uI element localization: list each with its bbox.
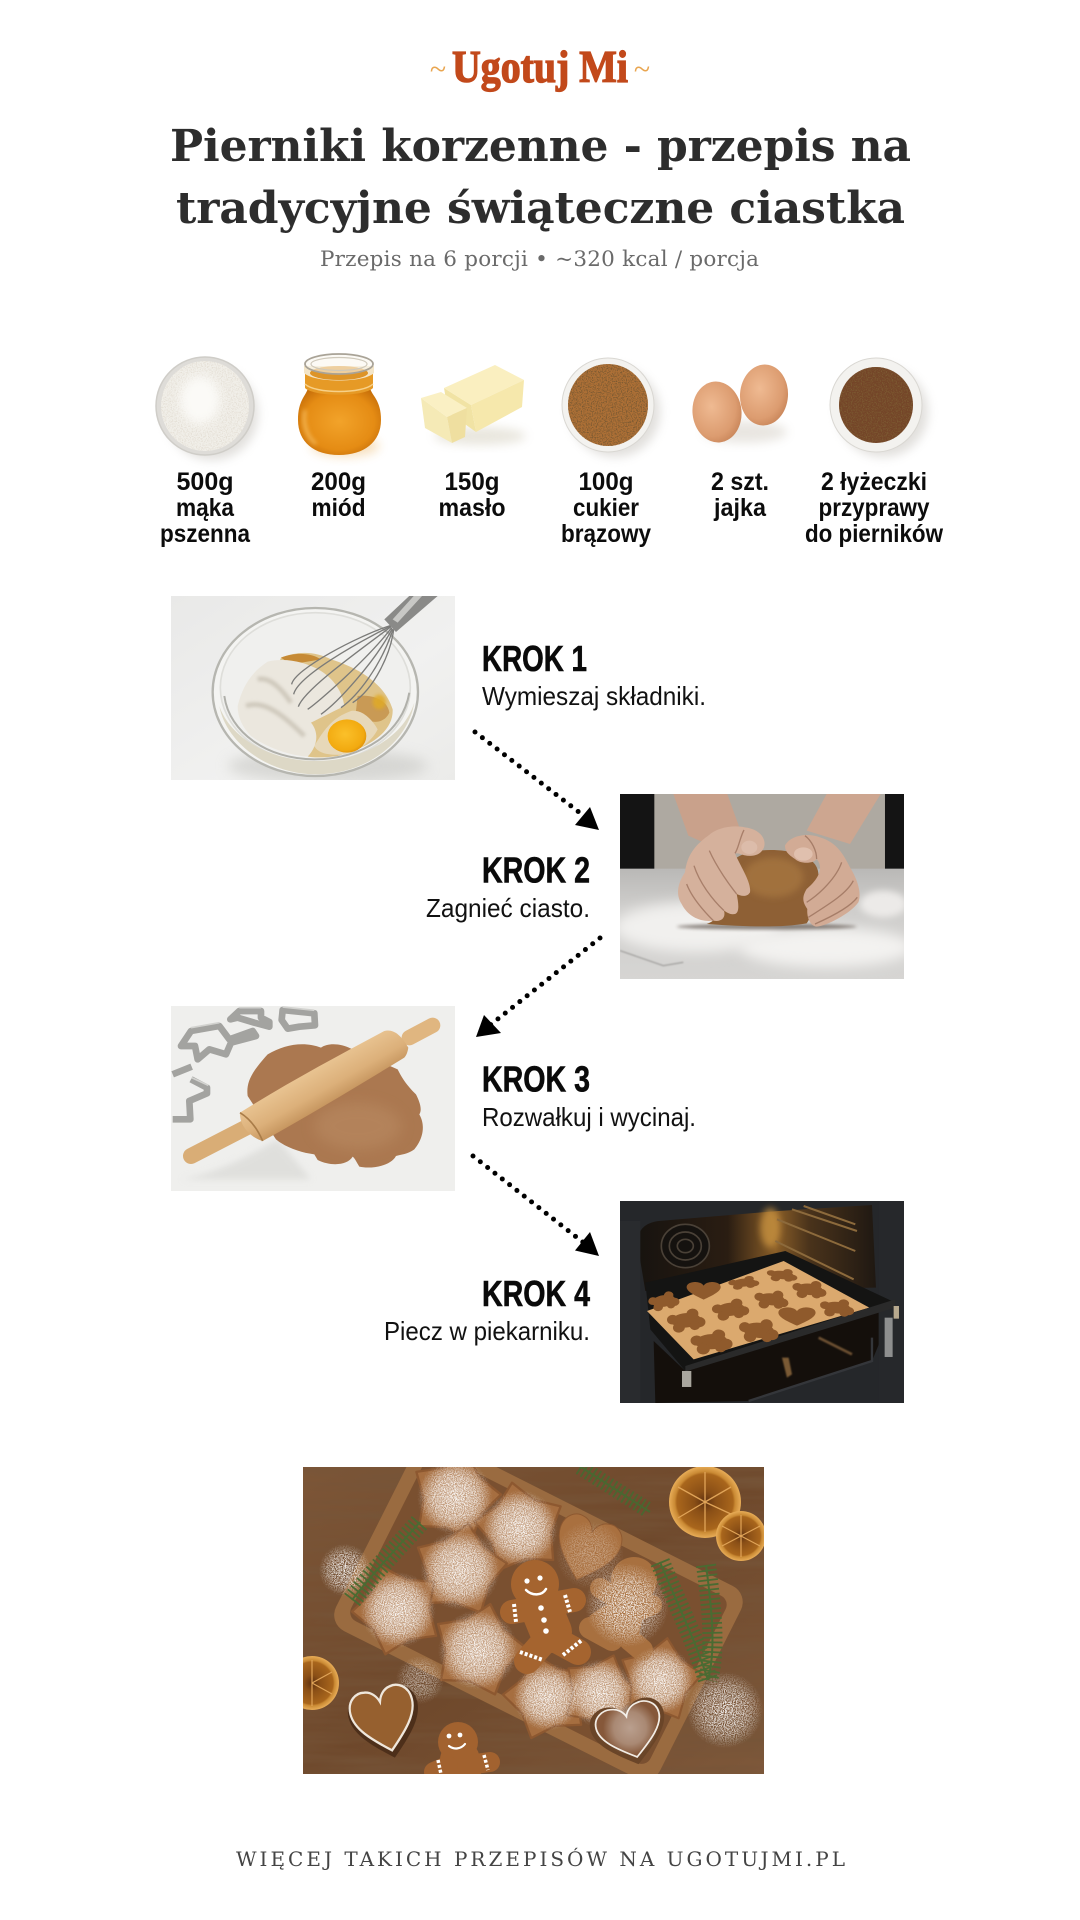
footer call to action: WIĘCEJ TAKICH PRZEPISÓW NA UGOTUJMI.PL bbox=[236, 1846, 845, 1871]
step 1 text: Wymieszaj składniki. bbox=[482, 681, 706, 711]
gingerbread man bbox=[511, 1560, 582, 1661]
icon: brown sugar bowl bbox=[562, 358, 660, 457]
step 4 photo: oven bbox=[619, 1201, 912, 1403]
ingredient label: butter bbox=[438, 468, 506, 522]
oranges bbox=[285, 1466, 766, 1710]
cookies bbox=[647, 1267, 855, 1355]
step 2 photo: kneading dough bbox=[613, 794, 913, 981]
step 2 text bbox=[426, 850, 590, 923]
ingredients panel bbox=[156, 354, 943, 548]
rosemary top bbox=[578, 1465, 650, 1512]
step 1 photo: mixing bowl bbox=[171, 594, 456, 783]
ingredient label: honey: 200g bbox=[311, 468, 366, 496]
rosemary left and right bbox=[352, 1522, 712, 1680]
arrow: step 1 to 2 bbox=[475, 732, 599, 830]
ingredient label: brown sugar: brązowy bbox=[561, 520, 651, 548]
title bbox=[170, 121, 911, 234]
step 2 text: Zagnieć ciasto. bbox=[426, 893, 590, 923]
icon: flour bowl bbox=[156, 357, 258, 460]
step 3 text: Rozwałkuj i wycinaj. bbox=[482, 1102, 696, 1132]
arrow: step 2 to 3 bbox=[476, 938, 600, 1037]
ingredient label: eggs bbox=[711, 468, 769, 522]
title: tradycyjne świąteczne ciastka bbox=[176, 183, 905, 234]
small sugared heart bbox=[590, 1698, 664, 1764]
iced heart bbox=[348, 1684, 418, 1758]
icon: honey jar bbox=[298, 354, 381, 457]
icon: gingerbread spice bowl bbox=[830, 358, 928, 457]
step 4 text bbox=[384, 1273, 590, 1346]
cookie cutters bbox=[173, 1010, 315, 1119]
icon: eggs bbox=[689, 363, 790, 445]
ingredient label: brown sugar: 100g bbox=[578, 468, 634, 496]
ingredient label: flour: mąka bbox=[176, 494, 235, 522]
ingredient label: flour bbox=[160, 468, 251, 548]
ingredient label: butter: 150g bbox=[444, 468, 500, 496]
wooden tray bbox=[334, 1467, 743, 1774]
icon: butter bbox=[421, 365, 526, 445]
arrow: step 3 to 4 bbox=[473, 1156, 599, 1256]
ingredient label: brown sugar bbox=[561, 468, 651, 548]
ingredient label: honey: miód bbox=[312, 494, 366, 522]
step 4 text: KROK 4 bbox=[482, 1273, 590, 1314]
final photo: gingerbread cookies on tray bbox=[303, 1467, 764, 1774]
step 3 photo: rolling dough bbox=[171, 1006, 456, 1192]
logo left swirl: ~ bbox=[430, 53, 446, 86]
ingredient label: flour: pszenna bbox=[160, 520, 251, 548]
small gingerbread man bbox=[434, 1722, 490, 1790]
logo: Ugotuj Mi bbox=[430, 42, 650, 92]
logo wordmark: Ugotuj Mi bbox=[452, 42, 628, 92]
ingredient label: brown sugar: cukier bbox=[573, 494, 639, 522]
ingredient label: spice: przyprawy bbox=[818, 494, 930, 522]
ingredient label: spice: do pierników bbox=[805, 520, 943, 548]
step 4 text: Piecz w piekarniku. bbox=[384, 1316, 590, 1346]
ingredient label: honey bbox=[311, 468, 366, 522]
step 1 text: KROK 1 bbox=[482, 638, 587, 679]
ingredient label: flour: 500g bbox=[176, 468, 234, 496]
sugared gingerbread man bbox=[590, 1557, 657, 1650]
step 3 text bbox=[482, 1058, 696, 1132]
step 3 text: KROK 3 bbox=[482, 1058, 590, 1100]
ingredient label: spice bbox=[805, 468, 943, 548]
ingredient label: spice: 2 łyżeczki bbox=[821, 468, 927, 496]
logo right swirl: ~ bbox=[634, 53, 650, 86]
ingredient label: butter: masło bbox=[438, 494, 506, 522]
ingredient label: eggs: jajka bbox=[713, 494, 767, 522]
ingredient label: eggs: 2 szt. bbox=[711, 468, 769, 496]
heart cookie on tray bbox=[559, 1514, 622, 1580]
step 1 text bbox=[482, 638, 706, 711]
powdered sugar speckle bbox=[319, 1459, 763, 1748]
subtitle: Przepis na 6 porcji • ~320 kcal / porcja bbox=[320, 247, 759, 272]
star cookies bbox=[351, 1467, 703, 1740]
powdered sugar soft bbox=[362, 1461, 692, 1729]
step 2 text: KROK 2 bbox=[482, 850, 590, 890]
title: Pierniki korzenne - przepis na bbox=[170, 121, 911, 172]
